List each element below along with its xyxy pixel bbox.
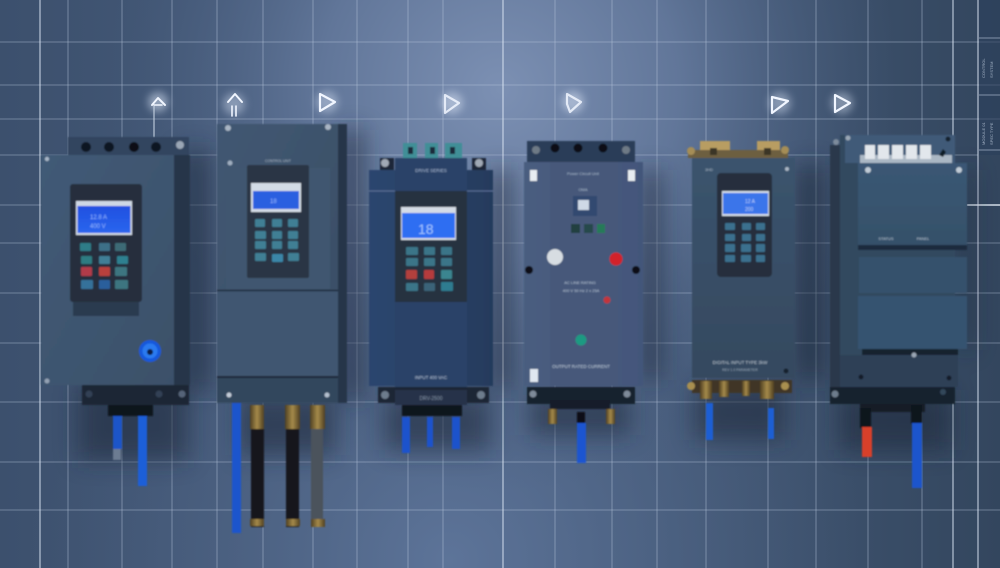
upper cover: STATUS bbox=[878, 236, 894, 241]
screen: 18 bbox=[418, 221, 434, 237]
back plate bbox=[830, 135, 955, 387]
gold top terminals bbox=[687, 141, 789, 158]
green buttons bbox=[571, 224, 605, 233]
housing bbox=[217, 124, 347, 403]
unit 1 bbox=[41, 137, 190, 486]
arrow 2: up with stem bbox=[223, 93, 245, 116]
spec panel top right: SYSTEM bbox=[989, 62, 994, 78]
screen: 12 A bbox=[745, 199, 756, 205]
unit 6 bbox=[830, 135, 967, 488]
spec panel top right bbox=[979, 0, 1000, 155]
red button bbox=[610, 252, 622, 266]
screen: 400 V bbox=[90, 224, 106, 230]
upper cover: PANEL bbox=[917, 236, 930, 241]
cables bbox=[113, 416, 147, 486]
device shadows bbox=[78, 130, 972, 460]
housing: DIGITAL INPUT TYPE 3kW bbox=[713, 360, 768, 365]
arrow 4: right triangle bbox=[441, 92, 463, 114]
upper cover bbox=[858, 163, 967, 250]
arrow 6: right triangle bbox=[769, 92, 791, 114]
cables bbox=[232, 403, 325, 533]
indicator display bbox=[573, 196, 597, 216]
blue knob bbox=[139, 340, 161, 362]
housing: OMA bbox=[578, 187, 588, 192]
bottom bracket bbox=[527, 387, 635, 409]
bottom bracket: DRV-2500 bbox=[420, 396, 443, 402]
housing: AC LINE RATING bbox=[564, 280, 596, 285]
cables bbox=[548, 409, 615, 463]
main panel bbox=[41, 155, 174, 385]
housing bbox=[524, 162, 643, 386]
housing: DRIVE SERIES bbox=[415, 168, 447, 173]
keypad bbox=[247, 159, 309, 278]
keys bbox=[255, 219, 299, 262]
cables bbox=[706, 403, 774, 440]
top bracket bbox=[68, 137, 189, 156]
green terminals bbox=[403, 143, 462, 158]
housing: 3HD bbox=[705, 167, 713, 172]
spec panel top right: MODULE 01 bbox=[981, 122, 986, 145]
unit 4 bbox=[524, 141, 643, 463]
spec panel top right: CONTROL bbox=[981, 58, 986, 78]
housing: INPUT 400 VAC bbox=[415, 375, 448, 380]
screen bbox=[76, 201, 132, 235]
gold bottom terminals bbox=[687, 380, 792, 399]
housing: REV 1.0 PARAMETER bbox=[722, 368, 758, 372]
keys bbox=[725, 223, 765, 262]
keys bbox=[80, 243, 128, 289]
top bracket bbox=[527, 141, 635, 162]
keypad bbox=[70, 184, 142, 316]
keypad bbox=[395, 191, 467, 302]
unit 3 bbox=[369, 143, 493, 453]
white knob bbox=[547, 249, 563, 265]
arrow 1: small up bbox=[148, 92, 168, 137]
housing: OUTPUT RATED CURRENT bbox=[552, 364, 610, 369]
housing: Power Circuit Unit bbox=[567, 171, 600, 176]
lower cover bbox=[840, 296, 967, 387]
front plate bbox=[226, 168, 330, 289]
housing: 400 V 50 Hz 2 x 25A bbox=[563, 288, 600, 293]
arrow 3: right triangle bbox=[316, 91, 338, 113]
cables bbox=[860, 405, 922, 488]
arrow 5: right triangle bbox=[562, 91, 584, 113]
arrow 7: right triangle bbox=[831, 92, 853, 114]
keypad: CONTROL UNIT bbox=[265, 159, 292, 163]
screen bbox=[722, 191, 769, 216]
side strip bbox=[174, 155, 190, 385]
housing bbox=[692, 158, 795, 378]
bottom bracket bbox=[378, 387, 489, 416]
small red lamp bbox=[604, 296, 610, 304]
arrow icons row bbox=[148, 91, 853, 137]
middle cover bbox=[859, 257, 967, 293]
cables bbox=[402, 417, 460, 453]
lower cover bbox=[217, 290, 338, 403]
screen: 12.8 A bbox=[90, 215, 107, 221]
white terminals bbox=[860, 145, 952, 163]
screen: 200 bbox=[745, 207, 754, 213]
green lamp bbox=[576, 334, 586, 346]
housing bbox=[369, 158, 493, 390]
unit 2 bbox=[217, 124, 347, 533]
unit 5 bbox=[687, 141, 795, 440]
keys bbox=[406, 247, 453, 291]
keypad bbox=[717, 173, 772, 277]
spec panel top right: SPEC TYPE bbox=[989, 122, 994, 145]
bottom bracket bbox=[830, 387, 955, 412]
screen: 18 bbox=[270, 199, 277, 205]
bottom connectors bbox=[82, 385, 189, 416]
